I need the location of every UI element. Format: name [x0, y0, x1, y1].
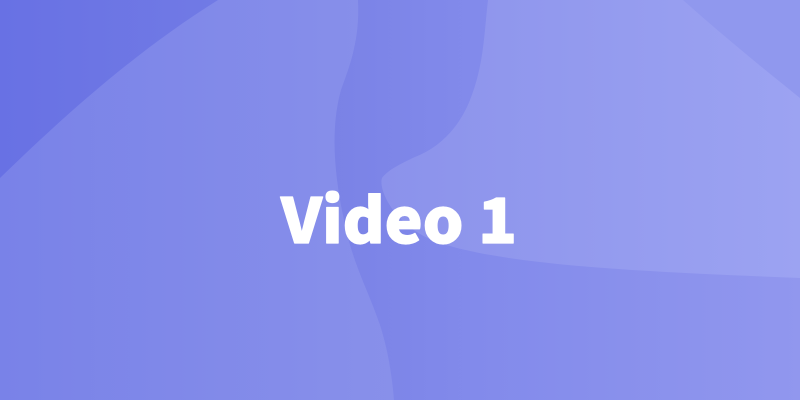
shape: top-right corner [683, 0, 800, 98]
shape: top-left dark corner [0, 0, 218, 178]
shape: upper-right light area [381, 0, 800, 278]
shape: middle band [335, 0, 800, 400]
title: Video 1 [280, 171, 517, 261]
